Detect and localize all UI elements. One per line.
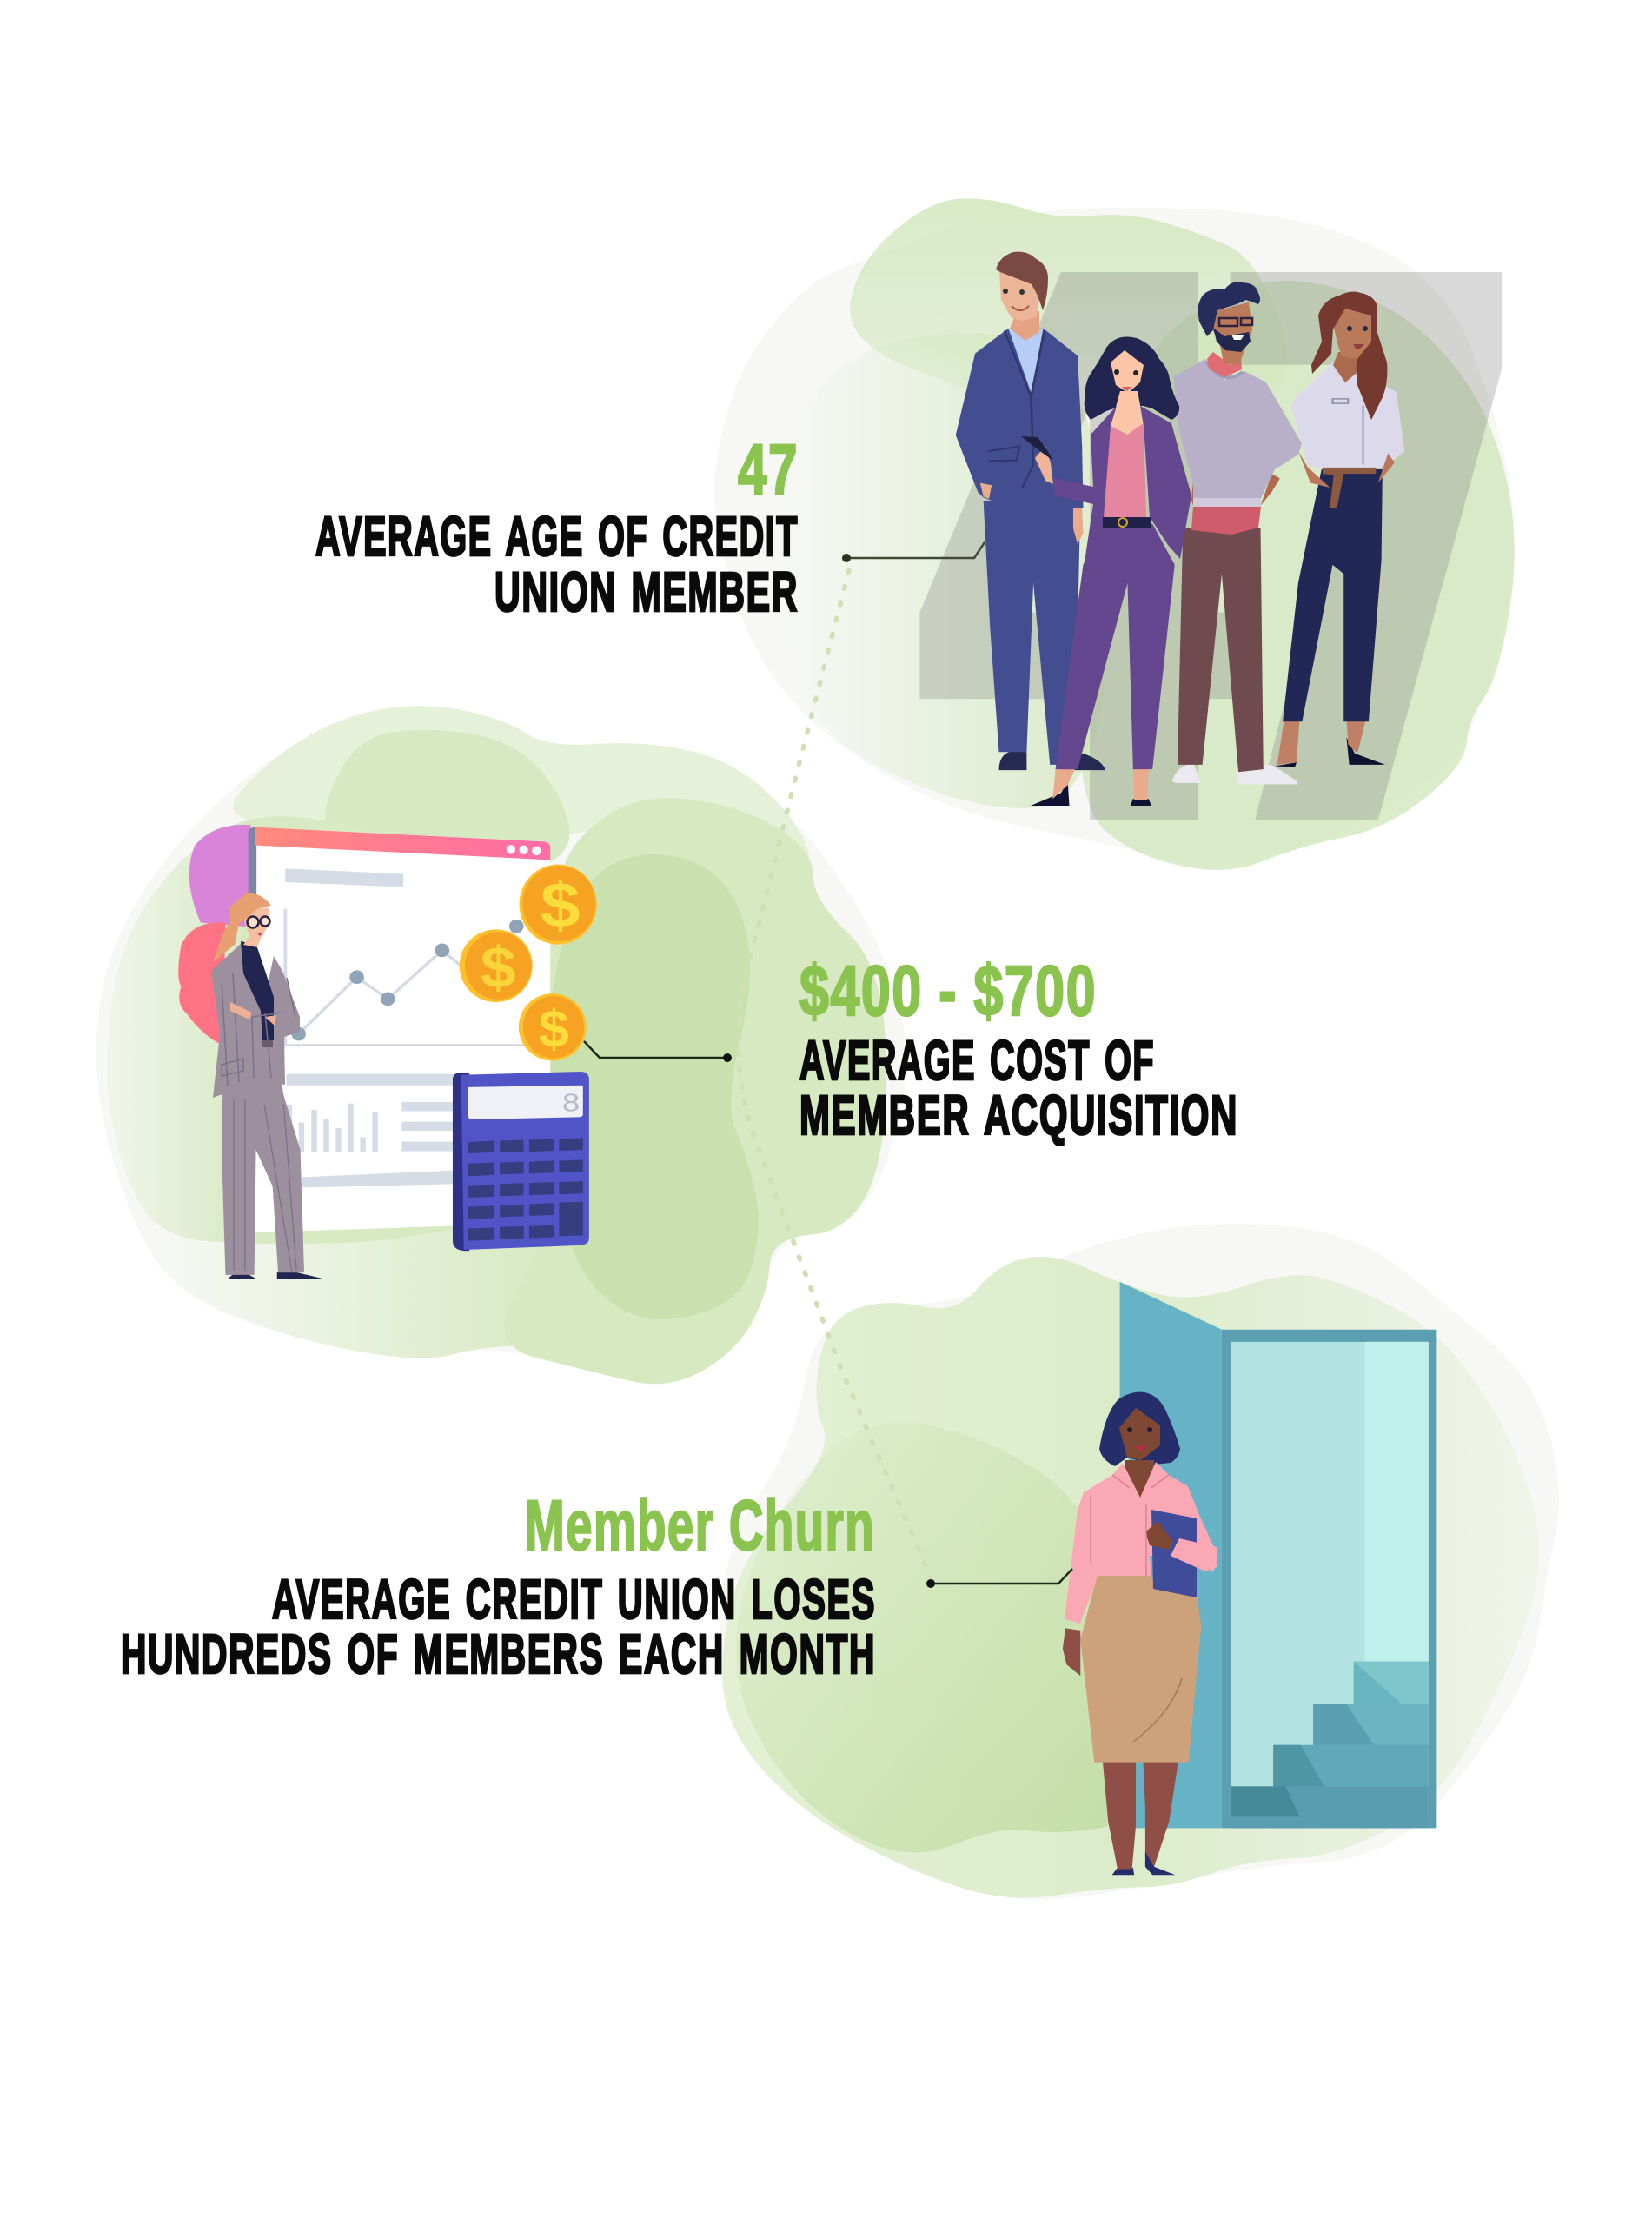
stat: member acquisition cost <box>584 952 1238 1146</box>
panel: member churn scene <box>719 1224 1559 1900</box>
figure: woman in pink shirt upper body <box>1065 1392 1217 1624</box>
stat description line 1: AVERAGE CREDIT UNION LOSES <box>272 1568 876 1631</box>
panel: average age scene <box>714 198 1515 870</box>
figure: woman in white shirt body <box>1275 362 1404 767</box>
stat value: cost range: $400 - $700 <box>799 952 1097 1031</box>
icon: gold coins: $ <box>539 999 569 1058</box>
blob: deep green inner lobe <box>547 854 759 1319</box>
blob: right lobe <box>505 799 886 1384</box>
blob: pale background <box>719 1224 1559 1900</box>
blob: left green lobe <box>779 333 1108 808</box>
figure: man in blue suit body <box>956 329 1105 770</box>
large background number 47 <box>919 272 1502 820</box>
blob: upper inner lobe <box>326 730 570 879</box>
head: man in blue suit <box>996 252 1048 341</box>
icon: decorative plants <box>178 825 253 1046</box>
icon: blue calculator: 8 <box>561 1090 581 1119</box>
blob: top lobe <box>233 706 809 861</box>
icon: blue calculator <box>453 1072 589 1251</box>
torso and head: woman in purple suit <box>1021 337 1191 568</box>
stat description line 2: HUNDREDS OF MEMBERS EACH MONTH <box>121 1623 876 1685</box>
figure: woman in grey suit legs <box>222 1059 322 1279</box>
stat description line 2: MEMBER ACQUISITION <box>799 1084 1238 1146</box>
stat value: member churn: Member Churn <box>525 1486 875 1565</box>
figure: bearded man legs and shoes <box>1172 474 1297 784</box>
stat description line 2: UNION MEMBER <box>494 561 799 623</box>
panel: member acquisition scene <box>96 706 906 1384</box>
blob: deep green lobe <box>735 1422 1138 1852</box>
figure: woman in purple suit legs <box>1031 524 1175 806</box>
icon: gold coins <box>460 865 597 1060</box>
blob: bottom fade <box>156 1225 624 1358</box>
blob: pale background <box>714 208 1514 862</box>
icon: open door with stairs <box>1120 1282 1436 1828</box>
figure: woman in grey suit upper body <box>211 893 300 1098</box>
figure: woman in pink shirt lower body <box>1063 1576 1201 1875</box>
blob: pale background <box>96 711 906 1383</box>
stat value: 47: 47 <box>738 430 799 509</box>
icon: gold coins: $ <box>541 870 581 941</box>
chart: presentation window <box>249 827 550 1232</box>
stat: member churn <box>121 1486 1072 1685</box>
figure details: heads and torsos of the group <box>996 252 1387 568</box>
stat description line 1: AVERAGE AGE OF CREDIT <box>315 505 799 568</box>
callout line to coin <box>584 1041 732 1062</box>
icon: gold coins: $ <box>481 935 516 1000</box>
blob: top green lobe <box>850 198 1287 441</box>
blob: main green <box>722 1257 1539 1897</box>
head: woman in white shirt <box>1311 292 1387 420</box>
torso and head: bearded man <box>1174 282 1302 535</box>
callout line to people <box>842 542 985 562</box>
blob: left lobe <box>107 816 564 1244</box>
stat: average age <box>315 430 985 623</box>
stat description line 1: AVERAGE COST OF <box>799 1029 1155 1092</box>
connector: dotted path linking the three stats <box>738 570 932 1581</box>
blob: right green lobe <box>1080 281 1515 870</box>
callout line to woman <box>926 1569 1072 1588</box>
